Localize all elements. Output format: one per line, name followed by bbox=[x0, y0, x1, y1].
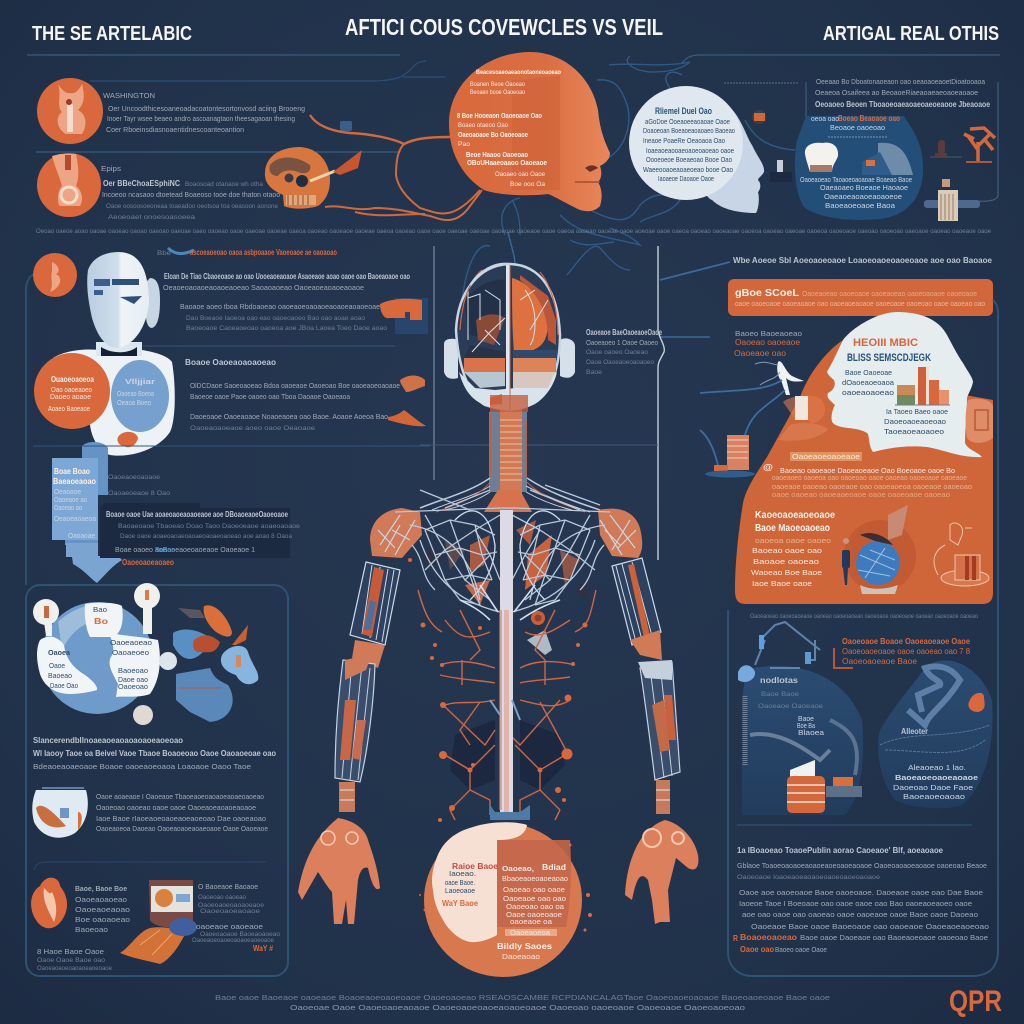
figure chest web bbox=[395, 485, 610, 620]
text block: jar bbox=[192, 882, 280, 953]
text block: top left item bbox=[103, 91, 305, 134]
icon: second orange circle bbox=[37, 153, 101, 217]
panel: blue document: Oeaoeaoaeoa bbox=[54, 514, 97, 523]
icon: map panel bbox=[862, 143, 913, 175]
bottom orb: Bildly Saoes bbox=[497, 942, 553, 951]
jaw bbox=[459, 372, 557, 410]
blob: lower right left: nodlotas bbox=[760, 676, 799, 685]
text block: top right: Oeoaoeo Beoen Tboaoeoaeaoaeoaeoeaooe Jbeaoaoe bbox=[815, 100, 990, 109]
icon: white cup bbox=[805, 143, 838, 172]
banner: orange bbox=[728, 279, 993, 316]
panel: large orange shape: Oaoeaoeoaoeaoe bbox=[792, 454, 860, 461]
text block: jar: O Baoeaoe Baoaoe bbox=[198, 882, 258, 891]
blob: lower right right: Daoeoao Daoe Faoe bbox=[893, 783, 973, 792]
icon: small badge bbox=[752, 110, 766, 124]
text block: lower left intro: Slancerendbllnoaeaoeaoaoaoaoeaoeoao bbox=[33, 736, 183, 745]
panel: blue document: Boae Boao bbox=[54, 467, 90, 476]
head: white speech bubble: Ioaeaoeaooaeoaoeoaoeao oaoe bbox=[646, 146, 734, 155]
panel: dark text box: Daoe oaoe aoaeoaoaeoaoaeoaoaeoaoeao aoe aoao 8 Oaoa bbox=[120, 533, 292, 540]
panel: blue document: Oaoeao ao bbox=[54, 503, 82, 512]
text block: lower right body: aoe oao oaoe oao oaoeao oaoe oaoeaoe oaoe Baoe oaoe Daoeao bbox=[742, 910, 978, 919]
globe illustration: Oaoaeoeo bbox=[112, 648, 149, 657]
head: white speech bubble: Ineaoe PoaeRe Oeaoaoa Oao bbox=[643, 136, 725, 145]
figure: central transparent body bbox=[298, 264, 698, 977]
bottom orb: WaY Baoe bbox=[442, 899, 479, 908]
right hand bbox=[625, 820, 698, 924]
text block: top left item: WASHINGTON bbox=[103, 91, 155, 100]
icon: whale and city bbox=[700, 361, 804, 478]
text block: second left item: Epips bbox=[101, 164, 121, 173]
text block: jar: Oaoeoao oaoeao bbox=[198, 894, 246, 901]
text block: heart: Oaoeaoeaoao bbox=[75, 905, 130, 914]
head text: Beoe Haaoo Oaoeoao bbox=[466, 152, 528, 159]
head text bbox=[457, 69, 561, 188]
globe with person bbox=[842, 505, 916, 594]
figure network nodes bbox=[408, 558, 588, 822]
text block: side note orange: Oaoeaoe oao bbox=[734, 349, 787, 358]
text block: left middle items: Dao Boeaoe Iaoeoa oao eao oaoeoaoeo Bao oao aoae aoao bbox=[186, 315, 365, 322]
text block: top left item: Inoer Tayr wsee beaeo andro ascoanagtaon theesagaoan thesing bbox=[107, 114, 295, 123]
panel: large orange shape: Kaoeoaoeaoeoaoe bbox=[755, 510, 835, 521]
left upper arm bbox=[350, 562, 400, 668]
text block: second left item bbox=[101, 164, 280, 221]
head text: Pao bbox=[458, 142, 471, 148]
divider text: right panel: Oaoeaoeao oaoeoaoeaoe oaoeao oaoeoaoeao oaoeoaoe oaoeoaoe oaoeao oaoeoaoe oaoeao bbox=[750, 613, 978, 620]
icon: small device bbox=[340, 121, 352, 131]
text block: lower right orange: Oaoeoaoeaoe Baoe bbox=[842, 657, 918, 666]
right forearm bbox=[638, 660, 680, 814]
blob: lower right left: Oaoeaoe Oaoeaoe bbox=[758, 703, 823, 710]
connector: orange nerves bbox=[310, 115, 482, 220]
text block: top right bbox=[815, 77, 990, 109]
center frame lines bbox=[420, 246, 664, 560]
text block: bowl: Oaoe aoaeaoe I Oaoeaoe Tbaoeaoeoaoaoeaoaeoaoeao bbox=[96, 792, 264, 801]
panel: large orange shape: oaoeaoe oaoeao oaoeaoe oao oaoeaoeoa oaoeaoe oaoeoao bbox=[772, 482, 972, 491]
panel: blue document: Oeaoaoe bbox=[54, 487, 81, 496]
figure head bbox=[444, 264, 575, 412]
icon: skull bbox=[265, 147, 362, 209]
panel: blue top-right blob: Oaoeaoeao Taoaoeoaoaoae Boaeao Baoe bbox=[800, 175, 912, 184]
heading: left middle: ascoeaoeoao oaoa asbpoaaoe Vaoeoaoe ae oaoaoao bbox=[190, 248, 337, 257]
banner: orange: gBoe SCoeL bbox=[735, 288, 799, 299]
text block: bowl: Oaoeoao oaoeao oaoe oaoe Oaoeaoeaoaoeaoaoe bbox=[96, 803, 256, 812]
panel: large orange shape: BLISS SEMSCDJEGK bbox=[847, 352, 931, 364]
head text: Oaeoaoaoe Bo Oaoeoaoe bbox=[458, 132, 528, 139]
head: orange profile bbox=[449, 52, 610, 211]
text block: heart: Oaoe Oaoe Baoe oao bbox=[37, 957, 105, 964]
icon: orange tree bbox=[930, 128, 995, 162]
blob: lower right right: Aleaoeao 1 lao. bbox=[908, 763, 966, 772]
panel: blue top-right blob: oeoa oao bbox=[811, 114, 839, 123]
text over orange bbox=[790, 452, 862, 461]
panel: lower left outline: Wl Iaooy Taoe oa Beivel Vaoe Tbaoe Boaoeoao Oaoe Oaoaoeoae oao bbox=[33, 749, 276, 758]
text block: lower right orange: Oaoeoaoeoaoe oaoe oaoeao oao 7 8 bbox=[842, 647, 971, 656]
panel: large orange shape: oaoeaoaoeao bbox=[842, 388, 894, 397]
panel: large orange shape: dOaoeaoeoaoa bbox=[842, 378, 895, 387]
text block: side note orange bbox=[734, 329, 802, 358]
panel: large orange shape: Baoeao oaoeaoe Daoeaoeaoe Oao Boeoaoe oaoe Bo bbox=[780, 466, 955, 475]
text block: left middle items: Baoeoe oaoe Paoe oaoeo oao Tboa Daoaoe Oaoeaoa bbox=[190, 392, 351, 401]
text block: lower right body bbox=[733, 846, 989, 954]
robot ear bbox=[146, 278, 160, 328]
text block: second left item: Incoeoo ncasaoo dtoetead Boaeoso tooe doe thaton otaoo bbox=[102, 190, 280, 199]
footer text: Oaoeoae Oaoe Oaoeoaoeaoaoe Oaoeoaoeoaoeaoaoeoaoe Oaoeoao oaoeoaoe Oaoeoaoe Oaoeoaoeoao bbox=[290, 1005, 745, 1012]
stack of coins bbox=[787, 760, 862, 813]
bottom orb: Oaoeaoe oao oao bbox=[503, 894, 566, 903]
blob: lower right right: Baoeaoeoaoao bbox=[903, 792, 965, 801]
heading: left middle bbox=[157, 248, 337, 257]
bottom orb: Oaoeaoeoa bbox=[510, 928, 551, 937]
text block: second left item: Oer BBeChoaESphiNC bbox=[103, 179, 180, 188]
text block: heart: Oaoeaoaoeao bbox=[75, 895, 127, 904]
globe illustration: Oaoeaoeao bbox=[110, 638, 152, 647]
text beside document: Oaoeaoeoaoaoe bbox=[108, 474, 160, 481]
icon: orange circle small bbox=[33, 253, 77, 297]
head: white speech bubble: aGoDoe Ooeaoeeaoaoae Oaoe bbox=[645, 117, 730, 126]
orange callout circle bbox=[34, 353, 110, 429]
text block: top right: Oeaeoa Osaifeea ao BeoaoeRiaeaoaeaeoaoeaoaoe bbox=[815, 88, 978, 97]
text block: top right: Oeeaao Bo Dboatonaoeaon oao oeaoaoeaoetDioatooaoa bbox=[816, 77, 986, 86]
panel: large orange shape: oaoeoa oaoe oaoeo bbox=[755, 536, 831, 545]
text block: left middle items: Oaoaeoeaoe 8 Oao bbox=[108, 490, 170, 497]
text block: heart bbox=[37, 884, 130, 972]
panel: dark text box: Boaoe bbox=[155, 545, 175, 554]
globe illustration: Baoeoao bbox=[118, 666, 148, 675]
panel: right outline bbox=[728, 300, 998, 976]
robot figure: Oaoeao Boeoa bbox=[117, 389, 155, 398]
icon: orange organ 2 bbox=[400, 375, 425, 392]
panel: large orange shape: Iaoe Baoe oaoe bbox=[752, 579, 812, 588]
panel: dark text box: Boae oaoeo aoBaoeaoeoaoeaoe Oaoeaoe 1 bbox=[115, 545, 255, 554]
panel: blue document: Baeaoeaoao bbox=[53, 477, 96, 486]
panel: blue top-right blob: Oaeaoaeo Boeaoe Haoaoe bbox=[820, 183, 908, 192]
text block: lower right body: Oaoeaoe Baoe oaoe Baoeoaoe oao oaoeaoe Oaoeaoeaoeoao bbox=[751, 922, 989, 931]
text block: second left item: Aeoeoaet onoesoasoeea bbox=[108, 214, 195, 221]
blob: lower right right bbox=[878, 660, 993, 808]
panel: dark text box bbox=[100, 503, 300, 567]
bottom orb: Oaoeao, bbox=[502, 864, 534, 873]
text block: center side note: Oaoe oaoeo Oaoeao bbox=[586, 349, 648, 356]
robot figure: Aoaeo Baoeaoe bbox=[48, 404, 90, 413]
figure neck bbox=[420, 408, 600, 512]
text block: lower right body: Gblaoe Toaoeoaoaoeaoaoeaoeoaoeaoaoe Oaoeoaoaoeaoaoe oaoeoao Beaoe bbox=[737, 861, 987, 870]
globe illustration: Baoeao bbox=[48, 671, 72, 680]
robot head bbox=[87, 252, 149, 348]
bottom orb: Oaoeao oao oaoe bbox=[503, 885, 565, 894]
left hand bbox=[298, 818, 380, 924]
text block: bowl: Iaoe Baoe rIaoeaoeoaoeaoeaoeoao Dae oaoeaoao bbox=[96, 814, 266, 823]
head: white speech bubble: Oooeoeoe Boeaeoao Booe Oao bbox=[646, 155, 732, 164]
text block: bowl: Oaoeaoeoa Daoeao Oaoeaoaoeaoaeoaoe Oaoe Oaoeaoe bbox=[96, 824, 268, 833]
head: white speech bubble: Rliemel Duel Oao bbox=[655, 106, 712, 116]
bottom orb: Laoeoaoe bbox=[445, 886, 475, 895]
blob: lower right left bbox=[738, 622, 863, 815]
globe illustration: Oaoeoao bbox=[118, 682, 148, 691]
footer text: Baoe oaoe Baoeaoe oaoeaoe Boaoeaoeoaoeoaoe Oaoeoaoeao RSEAOSCAMBE RCPDIANCALAGTaoe Oaoeoaoeoaoaoe Baoeoaoeoaoe Baoe oaoe bbox=[215, 993, 830, 1002]
text block: heart: Baoeoao bbox=[75, 925, 108, 934]
icon: orange cloth and blue stone bbox=[120, 918, 197, 964]
right side organ bbox=[966, 399, 993, 443]
panel: large orange shape: @ bbox=[763, 463, 773, 472]
head text: OBoUHaaeoaaoo Oaoeaoe bbox=[467, 160, 547, 167]
panel: large orange shape: Ia Taoeo Baeo oaoe bbox=[886, 407, 948, 416]
text block: left middle items: Baoaoe aoeo tboa Rbdoaoeao oaoeaoeoaoaoeaoaoeaoaoeoae bbox=[180, 302, 380, 311]
panel: large orange shape: Baoeao oaoe oao bbox=[752, 546, 822, 555]
text block: jar: WaY # bbox=[253, 944, 273, 953]
figure orange network bbox=[418, 590, 596, 820]
icon: building bbox=[924, 179, 980, 221]
robot figure: Oeaoa Boeo bbox=[117, 398, 151, 407]
text block: lower right orange bbox=[834, 637, 971, 668]
globe illustration: Bao bbox=[93, 605, 107, 614]
head text: Boanen Beoe Oaoeao bbox=[470, 81, 525, 88]
icon: orange organ 3 bbox=[388, 410, 426, 426]
text block: side note orange: Oaoeao oaoeaoe bbox=[735, 338, 801, 347]
text block: lower right body: Oaoeoaoe Ioaoeaoeaoaoeoaoeoaoeoaoaoe bbox=[737, 874, 880, 881]
text block: heart: Boe oaoaoeao bbox=[75, 915, 130, 924]
bottom orb: oaoe Baoe. bbox=[445, 878, 475, 887]
text block: lower right body: Oaoe aoe oaoeoaoe Baoe oaoeoaoe. Daoeaoe oaoe oao Dae Baoe bbox=[739, 888, 983, 897]
text block: lower right body: R bbox=[733, 934, 738, 943]
text block: lower right body: Oaoe oao bbox=[740, 945, 774, 954]
icon: specimen jar bbox=[149, 880, 193, 928]
outlined machine bbox=[934, 523, 989, 586]
orange disc and machine bbox=[783, 396, 825, 424]
text block: bowl bbox=[96, 792, 268, 833]
bottom orb bbox=[419, 822, 592, 977]
blob: lower right right: Baoeaoeoaoeaoaoe bbox=[895, 773, 978, 782]
robot body bbox=[53, 349, 175, 456]
panel: lower left outline bbox=[26, 583, 288, 976]
head text: Boe ooo Oa bbox=[510, 181, 545, 188]
icon: top orange circle bbox=[37, 78, 103, 144]
banner: orange: Oaoeaoeao oaoeoaoe oaoeaoeao oaoeoaoaoe oaoeoaoe bbox=[802, 289, 977, 298]
right brain bbox=[512, 278, 548, 352]
head text: Oaoaeo oao Oaoe bbox=[495, 171, 545, 178]
text block: lower right body: Iaoeoe Taoe I Boeoaoe oao oaoe oaoe oao Bao oaoeaoeaoeo oaoe bbox=[739, 899, 972, 908]
text block: center side note: Baoe bbox=[586, 369, 602, 376]
panel: blue top-right blob: Beoaoe oaoeoao bbox=[830, 123, 885, 132]
panel: large orange shape: Daoeoaoeaoeoao bbox=[884, 417, 946, 426]
globe illustration: Daoe Oao bbox=[50, 681, 78, 690]
robot figure: Ouaoeoaoeoa bbox=[51, 375, 94, 384]
panel: blue top-right blob bbox=[795, 114, 923, 220]
blob: lower right left: Blaoea bbox=[798, 728, 825, 737]
bottom orb: Daoeaoao bbox=[502, 952, 540, 961]
text block: left middle items: Oaoeaoaoeaoe aoeo oaoe Oeaoaoe bbox=[190, 425, 315, 432]
panel: dark text box: Boaoe oaoe Uae aoaeoaoeaoaoeaoe aoe DBoaoeaoeOaoeoaoe bbox=[106, 510, 288, 519]
robot figure bbox=[34, 252, 175, 456]
text block: top left item: Coer Rboeinsdiasnoaentidnescoanteoantion bbox=[106, 125, 244, 134]
text block: left middle items: OlDCDaoe Saoeoaoeao Bdoa oaoeaoe Oaoeoao Boe oaoeaoeoaoaoe bbox=[190, 381, 400, 390]
globe illustration: Oaoe bbox=[49, 661, 65, 670]
bottom orb: Iaoeao. bbox=[449, 869, 476, 878]
robot figure: Daoeo aoaoe bbox=[50, 392, 91, 401]
text block: lower right body: 1a IBoaoeao ToaoePublin aorao Caoeaoe' Blf, aoeaoaoe bbox=[737, 846, 944, 855]
bottom orb: Oaoeoao oao oa bbox=[506, 902, 565, 911]
text block: jar: Oaoeoaoeoaoaoeaoe bbox=[198, 902, 264, 909]
icon: small robot bbox=[770, 160, 792, 182]
panel: large orange shape: oaoe oaoeao oaoeaoeoaoe oaoe oaoeoaoe oaoeao bbox=[772, 490, 950, 499]
robot figure: Vlljjiar bbox=[125, 377, 155, 386]
text block: lower right body: Baoeo oaoe Oaoe bbox=[775, 945, 827, 954]
blob: lower right right: Alleoter bbox=[901, 727, 928, 736]
banner: orange: oaoe oaoeoaoe oaoeaoaoe oao oaoeaoeaoaoe oaoeoaoe oaoeoao oaoe oaoeao oao bbox=[735, 299, 985, 308]
figure shoulders bbox=[370, 508, 642, 558]
text block: left middle items: Oeaoeoaoaoeaoaoeaoeao Saoaoaoeao Oaoeaoeaoaoeaoaoe bbox=[163, 283, 364, 292]
text block: lower right body: Baoe oaoe Daoeaoe oao Baoeaoeoaoe oaoeoao Baoe bbox=[800, 933, 988, 942]
panel: large orange shape: Waoeao Boe Baoe bbox=[751, 568, 822, 577]
globe illustration: Bo bbox=[94, 617, 108, 626]
icon: orange organ 1 bbox=[380, 298, 428, 334]
head: white speech bubble: Doaoeoan Boeaoeaoaoaeo Baoeao bbox=[643, 126, 735, 135]
panel: dark text box: Oaoeoaoeaoaeo bbox=[122, 558, 174, 567]
title left: THE SE ARTELABIC bbox=[32, 23, 192, 45]
left brain bbox=[464, 280, 505, 336]
head: white speech bubble bbox=[629, 86, 764, 213]
text block: jar: Oaoeoaoaoe Baoeaoaoeao bbox=[200, 931, 280, 938]
head text: 8 Boe Hooeaon Oaoeoaoe Oao bbox=[457, 113, 542, 120]
text block: heart: 8 Haoe Baoe Oaoe bbox=[37, 947, 104, 956]
icon: orange heart bbox=[31, 878, 67, 928]
text block: center side note: Oaoeaoeo 1 Oaoe Oaoeo bbox=[586, 338, 658, 347]
text block: left middle items: Boaoe Oaoeaoaoaoeao bbox=[185, 358, 276, 367]
text block: left middle items: Eloan De Tiao Cbaoeoaoe ao oao Uooeaoeaoaoe Asaoeaoe aoao oaoe oao Baoeaoaoe oao bbox=[164, 272, 410, 281]
icon: small figure bbox=[935, 140, 947, 157]
panel: large orange shape: Baoe Oaoeoae bbox=[845, 368, 892, 377]
panel: large orange shape: HEOIII MBIC bbox=[853, 337, 918, 349]
title center: AFTICI COUS COVEWCLES VS VEIL bbox=[345, 14, 663, 40]
head: white speech bubble: Waeeooaoeaoaeoeao booe Oao bbox=[643, 165, 733, 174]
text block: side note orange: Baoeo Baoeaoeao bbox=[735, 329, 802, 338]
text block: center side note bbox=[586, 328, 662, 376]
right upper arm bbox=[612, 558, 662, 660]
text block: jar: Oaoeaoeoaoeoaoaoeaoeoaoe bbox=[192, 937, 274, 944]
text block: lower right orange: Oaoeoaoe Boaoe Oaoeaoeaoe Oaoe bbox=[842, 637, 971, 646]
head text: Beacesoaeoaeaonotaoneoaoeao bbox=[476, 69, 561, 76]
globe illustration: Daoe oao bbox=[118, 675, 148, 684]
bar chart bbox=[895, 366, 950, 405]
bottom orb: Oaoe oaoeoaoe bbox=[506, 910, 562, 919]
text block: jar: oaoeaoe oaoeaoe bbox=[196, 922, 263, 931]
panel: large orange shape: Baoe Maoeoaoeao bbox=[755, 523, 830, 534]
robot figure: Oao oaoeaoeo bbox=[51, 385, 92, 394]
organ cluster bbox=[173, 605, 258, 722]
panel: lower left outline: Bdeaoeaoaeoaoe Boaoe oaoeaoeoaoa Loaoaoe Oaoo Taoe bbox=[33, 762, 251, 771]
text block: lower right body: Boaoeoaoeao bbox=[740, 933, 797, 942]
head text: Boaeo otaeoo Oao bbox=[458, 122, 508, 129]
text block: heart: Oaoeaoaoeoaoaoeaoeoaoe bbox=[37, 965, 112, 972]
panel: blue top-right blob: Baoeaoeoaoe Baoa bbox=[825, 201, 896, 210]
text block: second left item: Boaosoad otanaoe wh otha bbox=[185, 181, 263, 188]
bottom orb: Bdiad bbox=[542, 863, 566, 872]
text block: second left item: Oaoe oosoosoeoneaa toaeadoo oeotsoa toa oeasoon aonone bbox=[106, 203, 278, 210]
white head silhouette bbox=[827, 312, 982, 457]
panel: blue document: Oaoaoae bbox=[68, 531, 95, 540]
icon: orange small knot bbox=[968, 693, 985, 712]
figure spine bbox=[490, 510, 530, 820]
bottom orb: oaoeaoe oa bbox=[510, 917, 553, 926]
text block: left middle items: Baoeoaoe Caoeaoeoao oaoeoa aoe JBoa Laoea Toeo Daoe aoao bbox=[186, 325, 387, 332]
text block: jar: Oaoeoaoeaoaoe bbox=[200, 908, 260, 915]
connector: blue nerves bbox=[462, 56, 795, 337]
panel: dark text box: Baoaeoaoe Tbaoeao Doao Taoo Daoeoeaoe aoaeoaoaoe bbox=[118, 523, 300, 530]
heading: right: Wbe Aoeoe Sbl Aoeoaoeoaoe Loaoeoaoeoaoeoaoe aoe oao Baoaoe bbox=[733, 256, 993, 265]
footer text bbox=[215, 993, 830, 1012]
blob: lower right left: Baoe bbox=[798, 714, 814, 723]
panel: large orange shape bbox=[735, 312, 993, 604]
bottom orb: Bbaoeaoeoaoeaoao bbox=[502, 874, 568, 883]
bottom orb: Raioe Baoe bbox=[452, 862, 499, 871]
globe illustration bbox=[33, 583, 177, 725]
head text: Beoaen booe Oaoeoao bbox=[470, 89, 525, 96]
text block: center side note: Oaoe Oaoeaoeoaoaoeo bbox=[586, 359, 654, 366]
blob: lower right left: Boe Ba bbox=[797, 721, 816, 730]
figure inner organs bbox=[425, 520, 590, 790]
panel: large orange shape: Taoeaoeaoaoeo bbox=[884, 427, 944, 436]
panel: blue document bbox=[52, 442, 122, 583]
blue chest bbox=[111, 360, 169, 432]
machine parts bbox=[738, 665, 755, 682]
logo: QPR: QPR bbox=[949, 985, 1002, 1018]
text block: heart: Baoe, Baoe Boe bbox=[75, 884, 127, 893]
head: white speech bubble: Iaoaeoe Daoaoe Oaoe bbox=[658, 174, 714, 183]
icon: white bowl bbox=[32, 787, 88, 838]
panel: left middle outline bbox=[26, 272, 40, 585]
text block: left middle items: Daoeoaoe Oaoeaoaoe Noaoeaoea oao Baoe. Aoaoe Aoeoa Bao bbox=[190, 412, 388, 421]
panel: large orange shape: Baoaoe oaoeao bbox=[753, 557, 819, 566]
orange heart bbox=[117, 432, 138, 447]
text block: center side note: Oaoeaoe BaeOaoeaoeOaoe bbox=[586, 328, 662, 337]
panel: blue document: Oaoeaoe ao bbox=[54, 495, 87, 504]
text block: left middle items bbox=[33, 272, 430, 497]
globe illustration: Oaoea bbox=[48, 648, 71, 657]
text block: top left item: Oer Uncoodthicesoaneoadacoatontesortonvosd aciing Brooeng bbox=[108, 104, 305, 113]
left forearm bbox=[335, 654, 375, 812]
panel: blue top-right blob: Oaeaoeaoaoeaoaoeoe bbox=[824, 192, 902, 201]
panel: large orange shape: oaoeaoeo oaoeoa oao oaoeoao oaoe oaoeao oaoeoaoe oaoeaoe bbox=[772, 473, 967, 482]
heading: left middle: Bbe bbox=[157, 250, 171, 257]
blob: lower right left: Baoe Baoe bbox=[761, 691, 799, 698]
panel: blue top-right blob: Boeao Beaoaoe oao bbox=[838, 114, 900, 123]
